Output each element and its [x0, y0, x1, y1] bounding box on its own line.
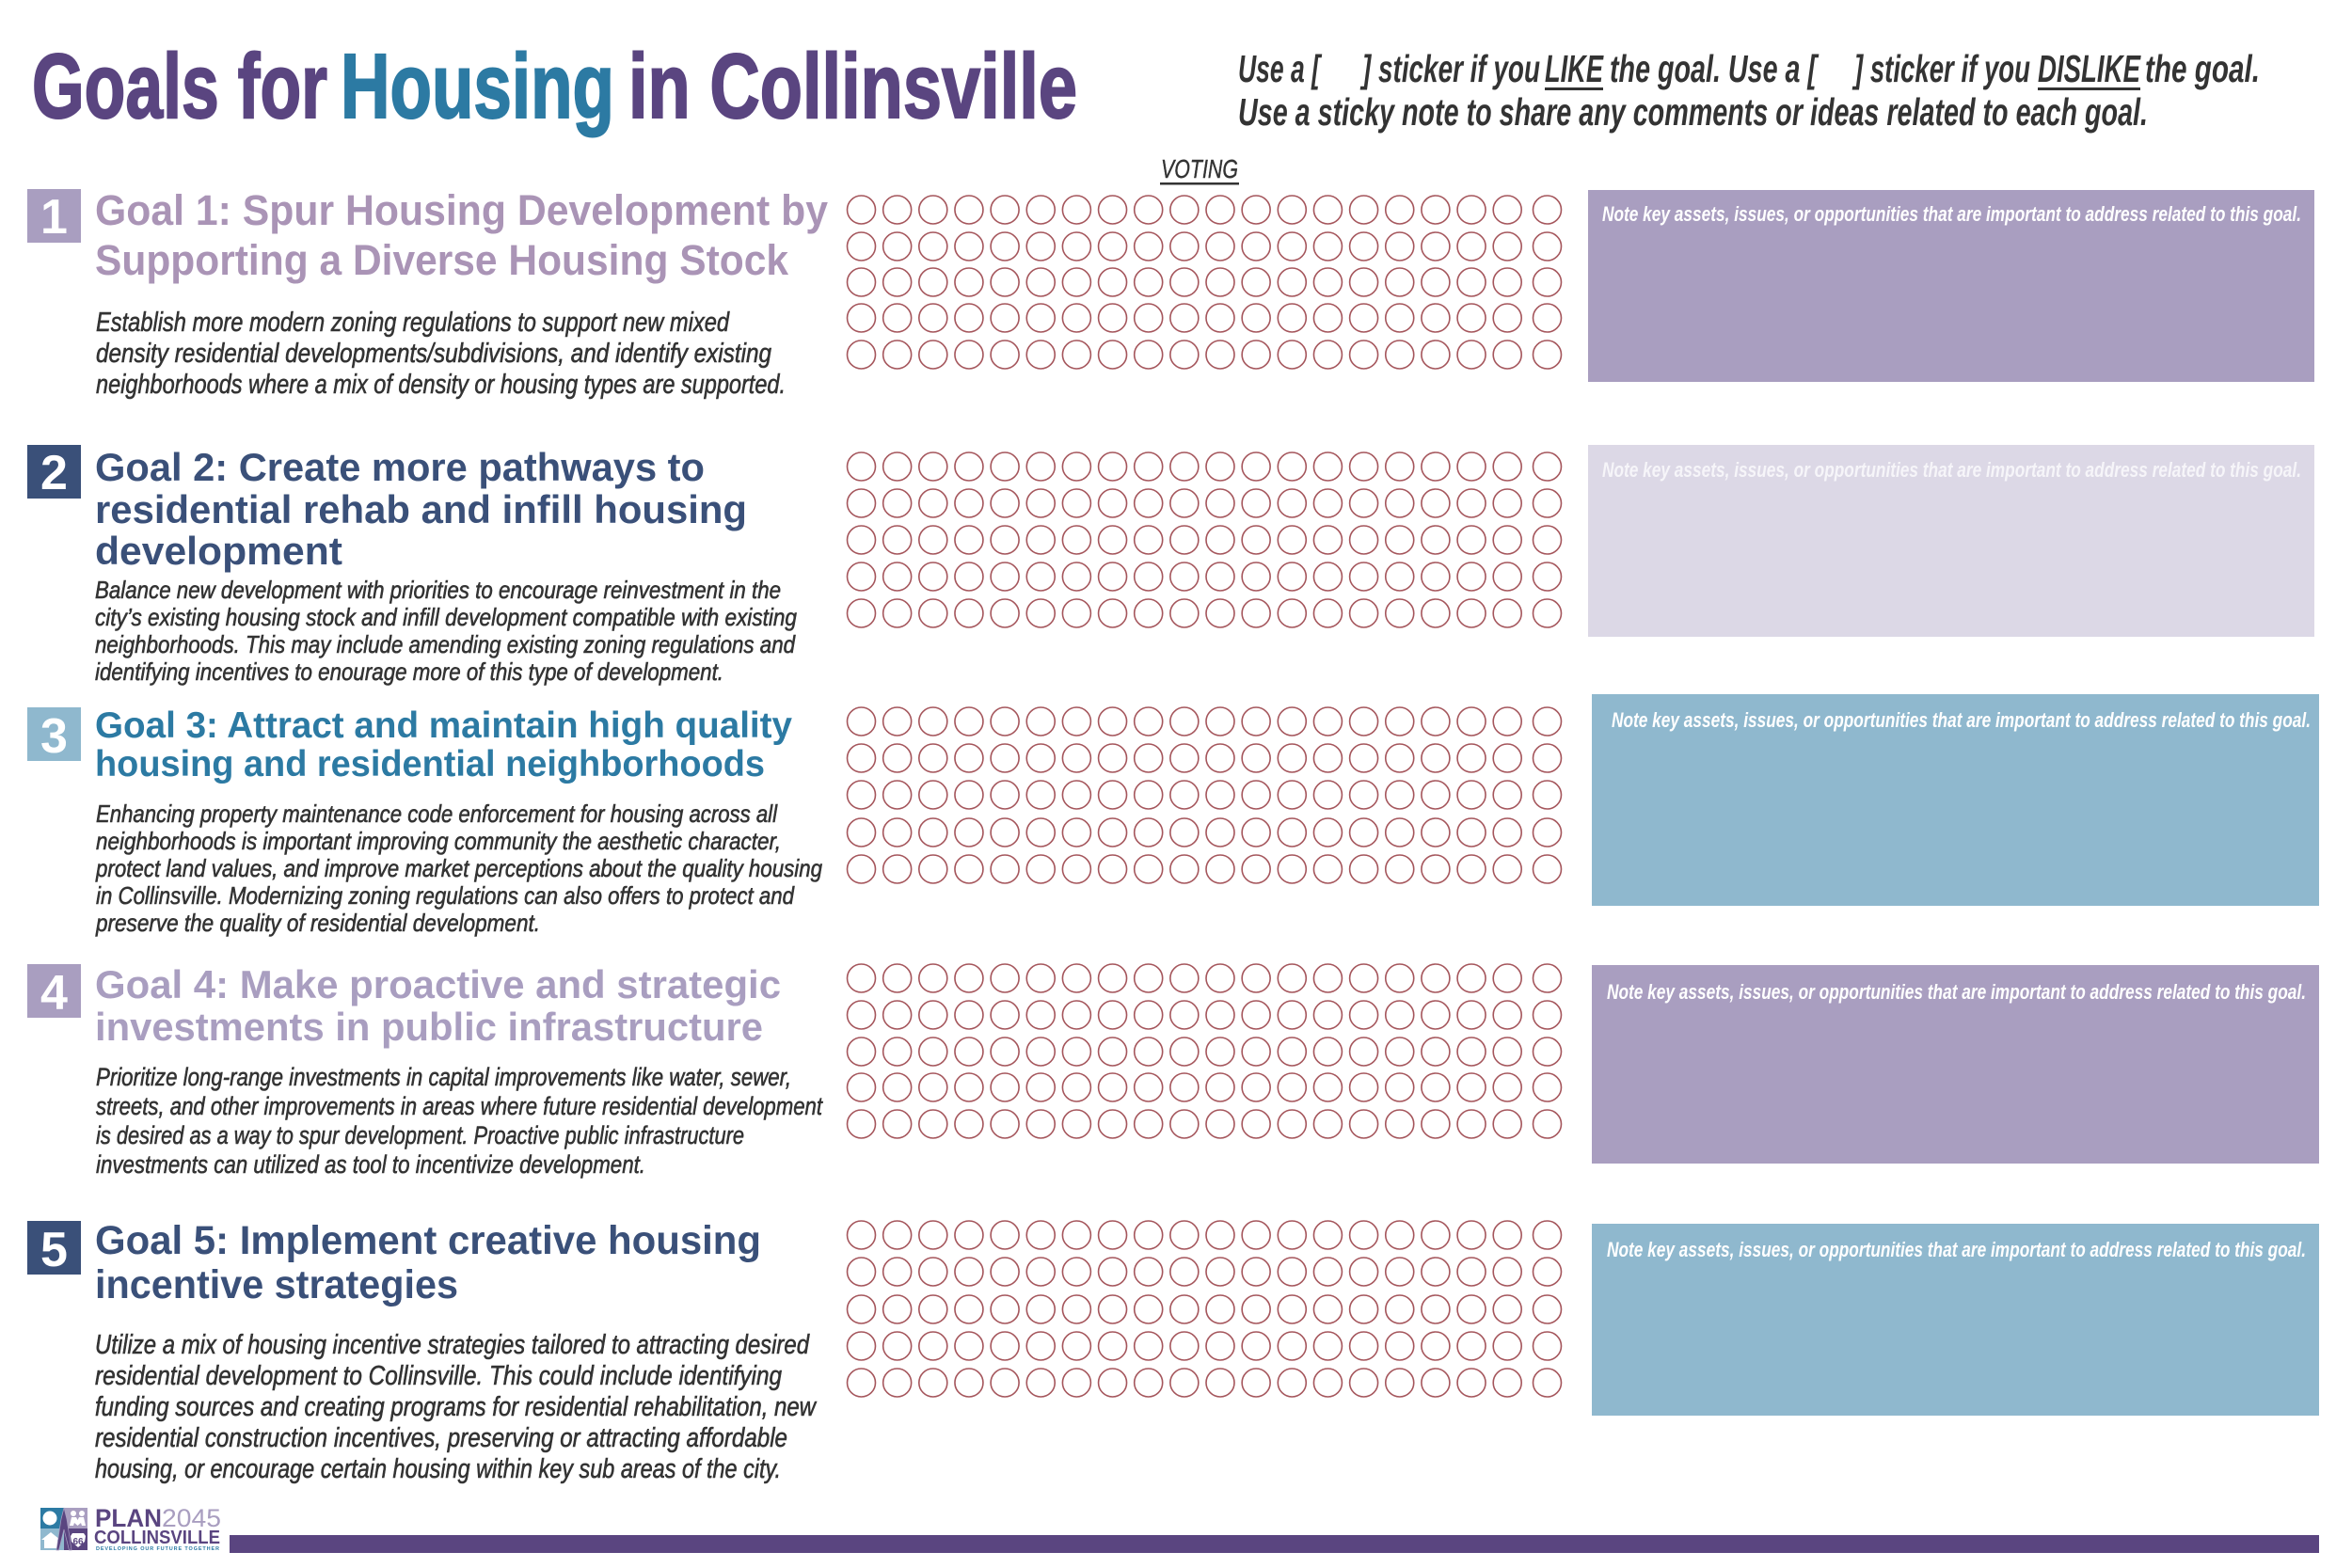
voting label: VOTING: [1161, 154, 1238, 183]
goal 4 number: 4: [40, 966, 68, 1021]
title: Goals for: [32, 35, 327, 137]
instructions: the goal.: [2145, 47, 2260, 90]
instructions: LIKE: [1545, 47, 1604, 90]
goal 2 heading: residential rehab and infill housing: [95, 487, 747, 531]
panel: goal 5: [27, 1218, 2319, 1484]
goal 2 description: city’s existing housing stock and infill development compatible with existing: [95, 603, 797, 631]
goal 3 voting circles: [847, 707, 1562, 883]
goal 1 voting circles: [847, 196, 1562, 369]
logo icon grid: 66: [72, 1537, 84, 1547]
goal 2 notes box: [1588, 445, 2314, 637]
instructions: ] sticker if you: [1851, 47, 2030, 90]
logo: Plan 2045 Collinsville: [40, 1504, 221, 1552]
instructions: the goal. Use a [: [1610, 47, 1820, 90]
goal 1 description: neighborhoods where a mix of density or housing types are supported.: [96, 370, 786, 400]
goal 3 description: protect land values, and improve market perceptions about the quality housing: [95, 854, 822, 882]
goal 5 heading: [95, 1218, 761, 1307]
goal 4 number: [27, 964, 81, 1021]
goal 4 description: investments can utilized as tool to incentivize development.: [96, 1150, 645, 1179]
goal 3 description: in Collinsville. Modernizing zoning regulations can also offers to protect and: [96, 881, 795, 910]
goal 2 description: [95, 576, 797, 686]
goal 3 description: preserve the quality of residential development.: [95, 909, 540, 937]
goal 5 number: [27, 1221, 81, 1277]
goal 4 description: is desired as a way to spur development. Proactive public infrastructure: [96, 1121, 744, 1149]
goal 1 description: density residential developments/subdivisions, and identify existing: [96, 339, 771, 369]
logo wordmark: DEVELOPING OUR FUTURE TOGETHER: [96, 1546, 219, 1552]
goal 2 voting circles: [847, 452, 1562, 627]
logo wordmark: PLAN: [95, 1504, 162, 1532]
goal 5 description: [95, 1330, 818, 1484]
goal 4 heading: investments in public infrastructure: [95, 1005, 763, 1049]
goal 3 number: 3: [40, 709, 68, 764]
goal 1 heading: Supporting a Diverse Housing Stock: [95, 236, 789, 284]
goal 3 description: neighborhoods is important improving community the aesthetic character,: [96, 827, 781, 855]
goal 1 number: 1: [40, 190, 68, 245]
goal 5 notes box: [1592, 1224, 2319, 1416]
goal 1 notes box: [1588, 190, 2314, 382]
goal 2 description: neighborhoods. This may include amending existing zoning regulations and: [95, 630, 796, 658]
instructions: [1238, 47, 2260, 134]
goal 5 voting circles: [847, 1221, 1562, 1397]
title: in Collinsville: [628, 35, 1077, 137]
goal 1 heading: Goal 1: Spur Housing Development by: [95, 186, 828, 234]
goal 5 description: Utilize a mix of housing incentive strategies tailored to attracting desired: [95, 1330, 810, 1360]
goal 2 heading: [95, 445, 747, 573]
goal 2 heading: development: [95, 529, 342, 573]
goal 2 number: 2: [40, 446, 68, 500]
panel: goal 4: [27, 962, 2319, 1179]
goal 2 heading: Goal 2: Create more pathways to: [95, 445, 705, 489]
goal 2 description: identifying incentives to enourage more of this type of development.: [95, 657, 723, 686]
goal 3 heading: Goal 3: Attract and maintain high quality: [95, 705, 792, 746]
logo icon grid: [40, 1508, 87, 1550]
goal 2 description: Balance new development with priorities to encourage reinvestment in the: [95, 576, 781, 604]
goal 5 number: 5: [40, 1223, 68, 1277]
panel: goal 2: [27, 445, 2314, 686]
goal 3 heading: housing and residential neighborhoods: [95, 744, 765, 784]
goal 3 heading: [95, 705, 792, 784]
goal 5 description: residential construction incentives, preserving or attracting affordable: [95, 1423, 787, 1453]
logo wordmark: [94, 1504, 221, 1552]
goal 4 description: Prioritize long-range investments in capital improvements like water, sewer,: [96, 1063, 791, 1091]
goal 4 voting circles: [847, 964, 1562, 1138]
goal 4 description: [96, 1063, 823, 1179]
goal 5 heading: incentive strategies: [95, 1262, 458, 1307]
panel: goal 1: [27, 186, 2314, 400]
goal 3 description: Enhancing property maintenance code enforcement for housing across all: [96, 800, 778, 828]
goal 1 description: Establish more modern zoning regulations to support new mixed: [96, 308, 730, 338]
goal 4 heading: Goal 4: Make proactive and strategic: [95, 962, 781, 1006]
goal 4 description: streets, and other improvements in areas where future residential development: [96, 1092, 823, 1120]
goal 5 description: residential development to Collinsville. This could include identifying: [95, 1361, 782, 1391]
goal 1 heading: [95, 186, 828, 284]
goal 3 notes box: [1592, 694, 2319, 906]
goal 5 description: funding sources and creating programs for residential rehabilitation, new: [95, 1392, 818, 1422]
goal 4 notes box: [1592, 965, 2319, 1164]
title: Housing: [341, 35, 614, 137]
goal 1 number: [27, 189, 81, 245]
goal 5 heading: Goal 5: Implement creative housing: [95, 1218, 761, 1263]
goal 2 number: [27, 445, 81, 500]
instructions: ] sticker if you: [1359, 47, 1540, 90]
goal 5 description: housing, or encourage certain housing within key sub areas of the city.: [95, 1454, 781, 1484]
logo wordmark: COLLINSVILLE: [94, 1527, 220, 1548]
goal 3 number: [27, 707, 81, 764]
footer bar: [230, 1535, 2319, 1553]
logo wordmark: 2045: [162, 1504, 221, 1532]
goal 4 heading: [95, 962, 781, 1049]
instructions: DISLIKE: [2038, 47, 2141, 90]
instructions: Use a [: [1238, 47, 1323, 90]
goal 3 description: [95, 800, 822, 937]
title: [32, 35, 1077, 137]
goal 1 description: [96, 308, 786, 400]
panel: goal 3: [27, 694, 2319, 937]
